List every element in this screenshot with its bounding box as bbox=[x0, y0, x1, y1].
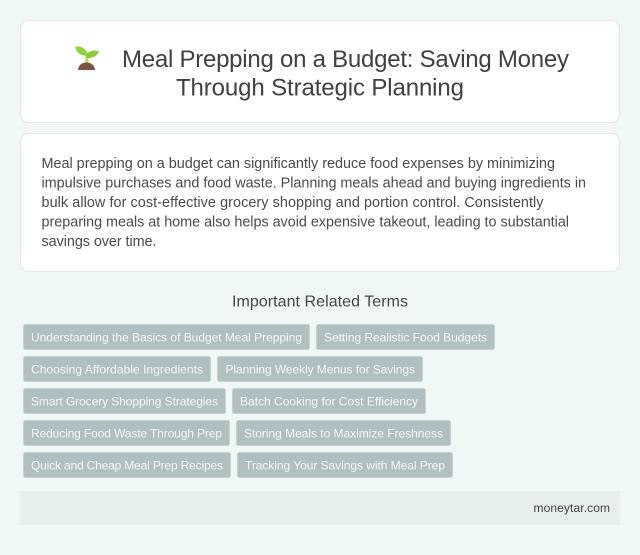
tag bbox=[24, 324, 310, 350]
panel: title header bbox=[20, 20, 620, 122]
icon: seedling bbox=[75, 47, 99, 70]
tag bbox=[236, 420, 450, 446]
tag bbox=[238, 452, 452, 478]
summary paragraph: bulk allow for cost-effective grocery shopping and portion control. Consistently bbox=[42, 195, 544, 211]
footer bbox=[20, 491, 620, 525]
footer source: moneytar.com bbox=[534, 501, 610, 515]
title: Meal Prepping on a Budget: Saving Money bbox=[122, 46, 569, 73]
tag: Planning Weekly Menus for Savings bbox=[226, 362, 415, 376]
tag: Reducing Food Waste Through Prep bbox=[31, 426, 222, 440]
tag bbox=[24, 420, 230, 446]
tag bbox=[24, 356, 210, 382]
tag bbox=[24, 452, 230, 478]
tag: Choosing Affordable Ingredients bbox=[31, 362, 203, 376]
tag bbox=[316, 324, 494, 350]
title bbox=[122, 46, 569, 102]
tag: Tracking Your Savings with Meal Prep bbox=[245, 458, 445, 472]
tag: Quick and Cheap Meal Prep Recipes bbox=[31, 458, 223, 472]
tag bbox=[218, 356, 422, 382]
tag group: related terms bbox=[24, 324, 494, 478]
tag: Batch Cooking for Cost Efficiency bbox=[240, 394, 418, 408]
summary paragraph: impulsive purchases and food waste. Planning meals ahead and buying ingredients in bbox=[42, 176, 586, 192]
heading: related terms: Important Related Terms bbox=[232, 294, 408, 310]
summary paragraph: preparing meals at home also helps avoid expensive takeout, leading to substantial bbox=[42, 214, 569, 230]
summary paragraph: Meal prepping on a budget can significantly reduce food expenses by minimizing bbox=[42, 156, 555, 172]
summary paragraph: savings over time. bbox=[42, 234, 156, 250]
tag: Setting Realistic Food Budgets bbox=[324, 330, 487, 344]
tag bbox=[232, 388, 426, 414]
tag: Smart Grocery Shopping Strategies bbox=[31, 394, 218, 408]
tag: Storing Meals to Maximize Freshness bbox=[244, 426, 443, 440]
panel: summary text bbox=[20, 134, 620, 272]
title: Through Strategic Planning bbox=[176, 74, 464, 102]
summary paragraph bbox=[42, 156, 586, 250]
tag bbox=[24, 388, 226, 414]
tag: Understanding the Basics of Budget Meal Prepping bbox=[31, 330, 302, 344]
